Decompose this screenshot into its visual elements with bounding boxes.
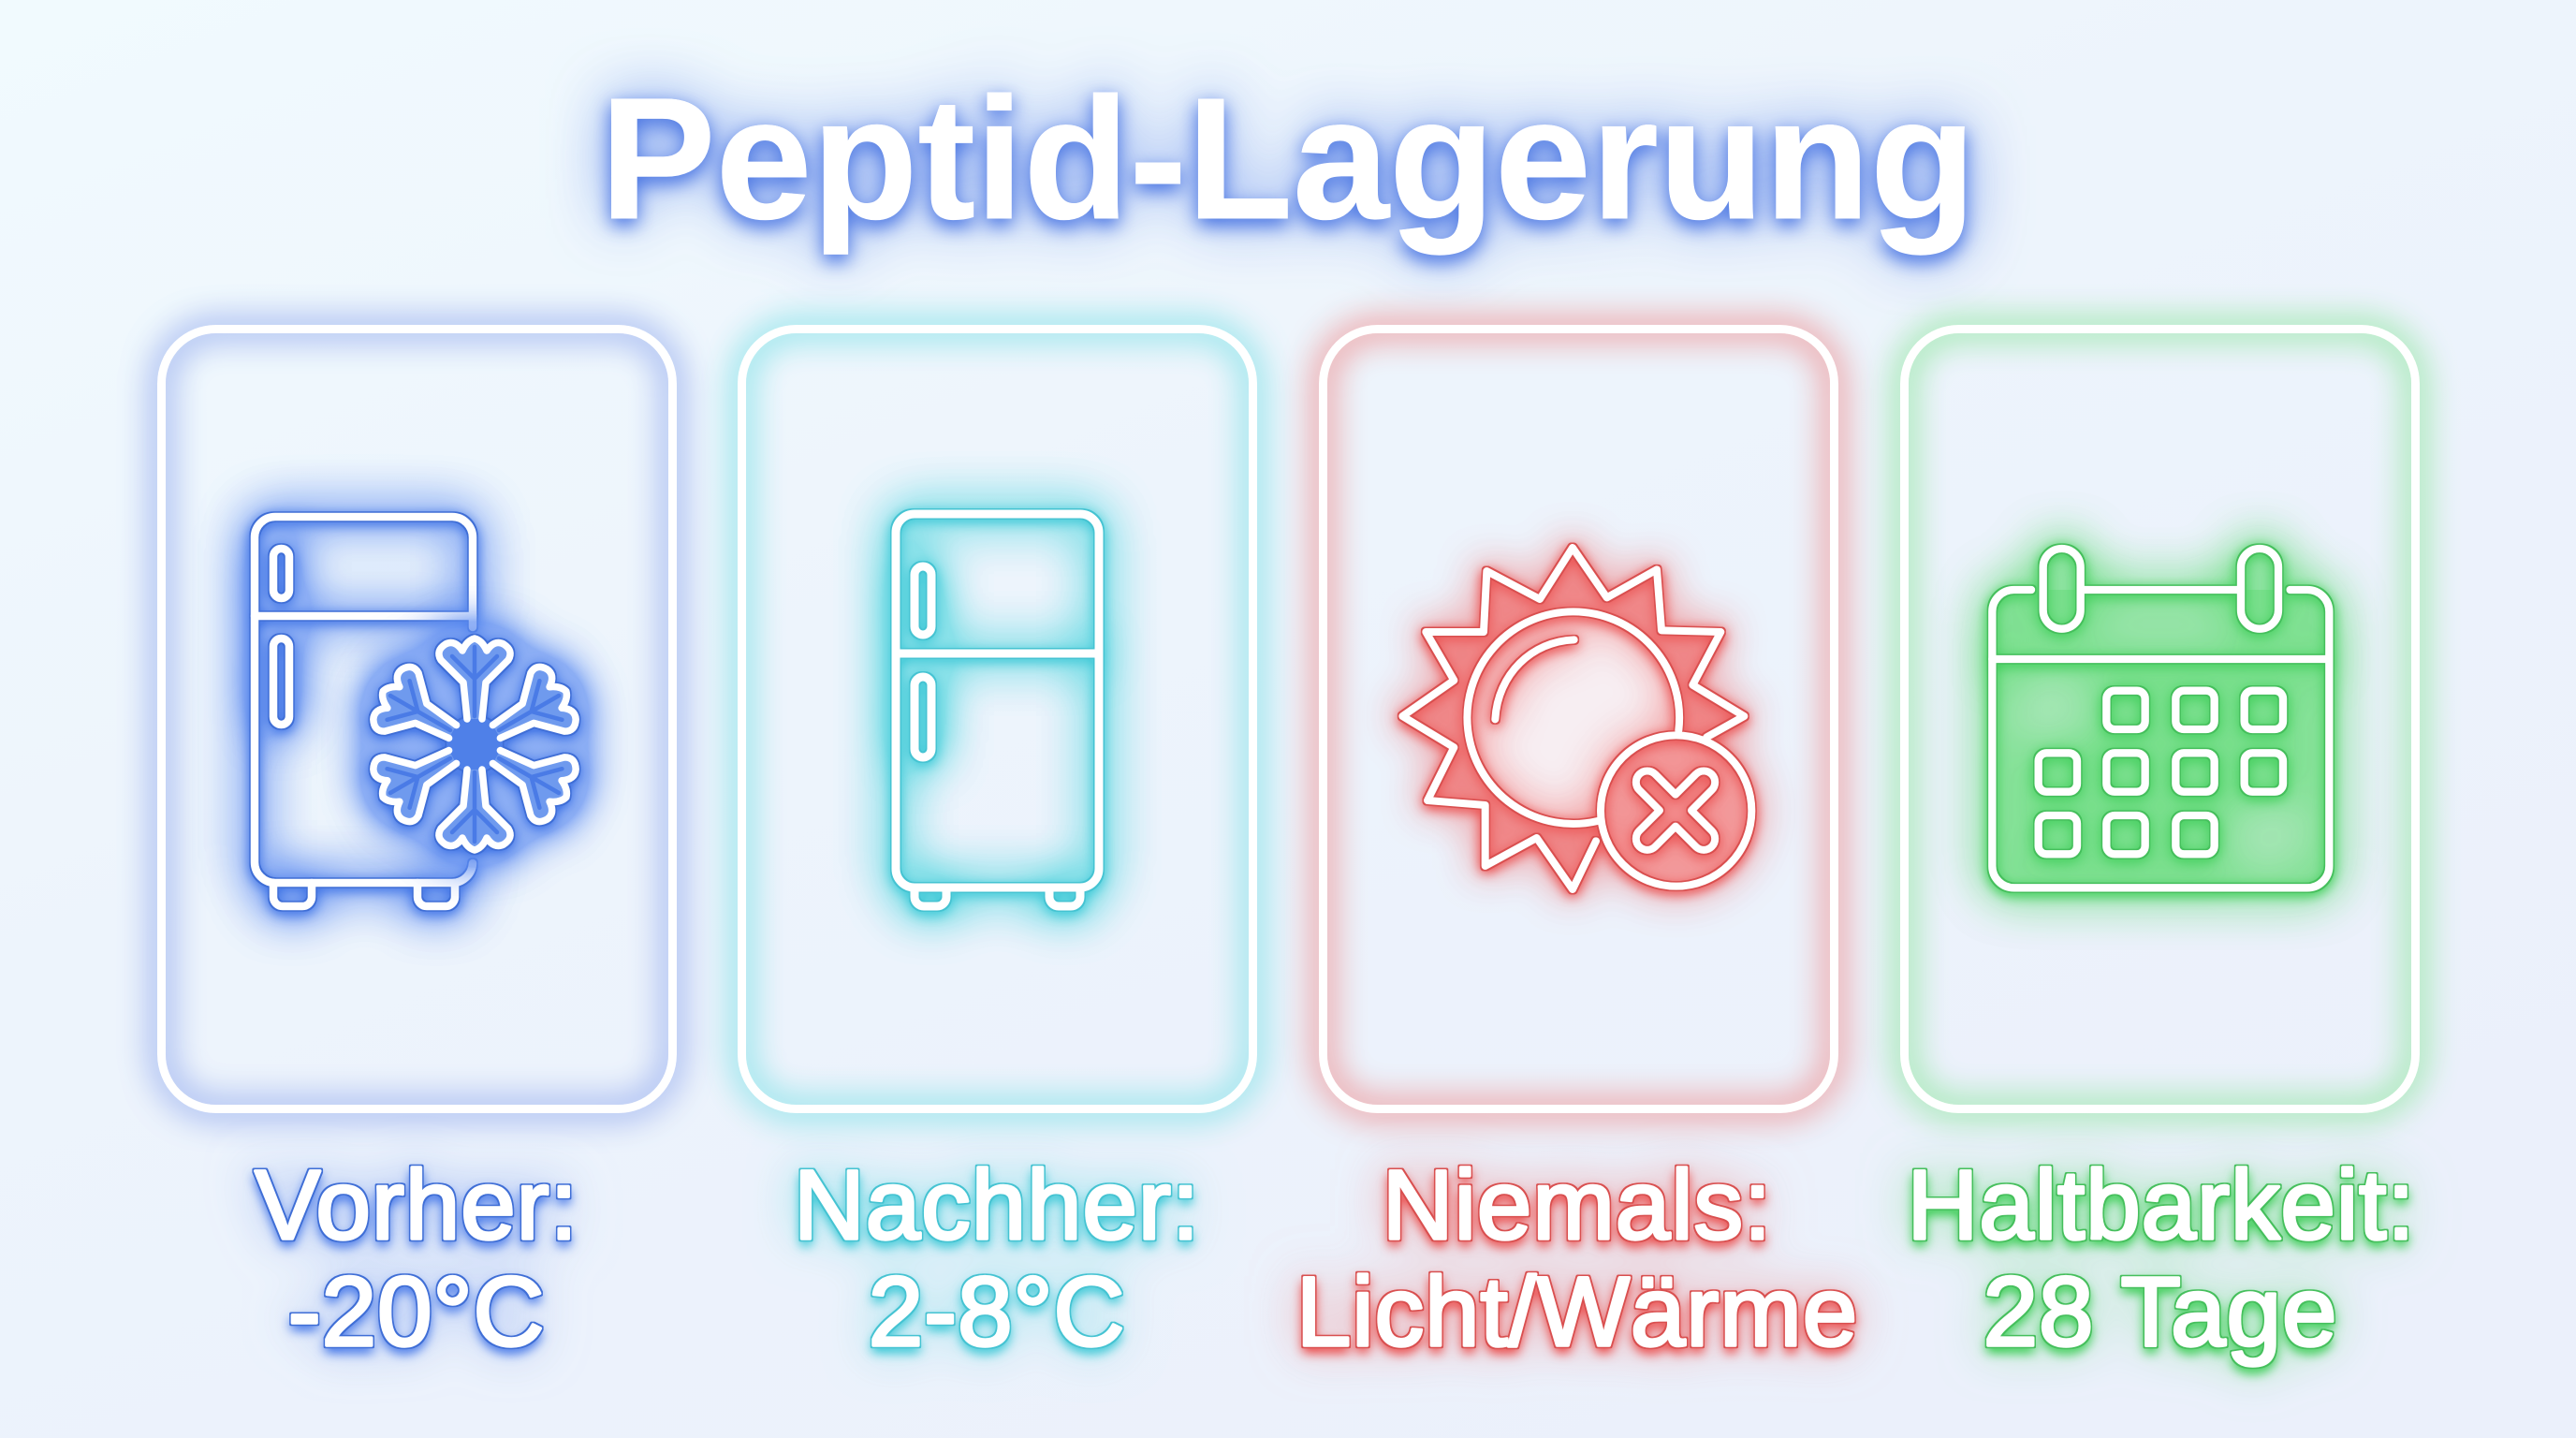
label: Nachher: Nachher:	[794, 1151, 1200, 1260]
icon: calendar	[1992, 549, 2329, 888]
label: Haltbarkeit	[1907, 1151, 2416, 1367]
snowflake spines	[379, 647, 570, 842]
label: Vorher: Vorher:	[255, 1151, 578, 1260]
label: Niemals	[1296, 1151, 1858, 1367]
sun tinted fill	[1402, 548, 1751, 889]
icon: fridge	[896, 514, 1099, 906]
panel: Vorher -20°C	[161, 330, 672, 1367]
calendar tinted fill	[1992, 590, 2329, 888]
card frame	[1904, 330, 2415, 1108]
panel: Haltbarkeit 28 Tage	[1904, 330, 2416, 1367]
label: Vorher: -20°C	[288, 1257, 545, 1367]
label: Haltbarkeit: Haltbarkeit:	[1907, 1151, 2416, 1260]
label: Nachher: 2-8°C	[869, 1257, 1125, 1367]
label: Nachher	[794, 1151, 1200, 1367]
panel: Niemals Licht/Wärme	[1296, 330, 1858, 1367]
snowflake arms	[365, 638, 584, 850]
label: Niemals: Niemals:	[1383, 1151, 1772, 1260]
snowflake	[365, 638, 584, 850]
title: Peptid-Lagerung	[600, 63, 1976, 256]
label: Niemals: Licht/Wärme	[1296, 1257, 1858, 1367]
icon: sun with cross	[1402, 548, 1751, 889]
panel: Nachher 2-8°C	[741, 330, 1252, 1367]
label: Haltbarkeit: 28 Tage	[1983, 1257, 2337, 1367]
sun outline, ring and cross	[1402, 548, 1751, 889]
card frame	[161, 330, 672, 1108]
icon: freezer with snowflake	[255, 517, 584, 906]
freezer body	[255, 517, 473, 906]
calendar outline and day squares	[1992, 549, 2329, 888]
label: Vorher	[255, 1151, 578, 1367]
card frame	[1324, 330, 1835, 1108]
card frame	[741, 330, 1252, 1108]
